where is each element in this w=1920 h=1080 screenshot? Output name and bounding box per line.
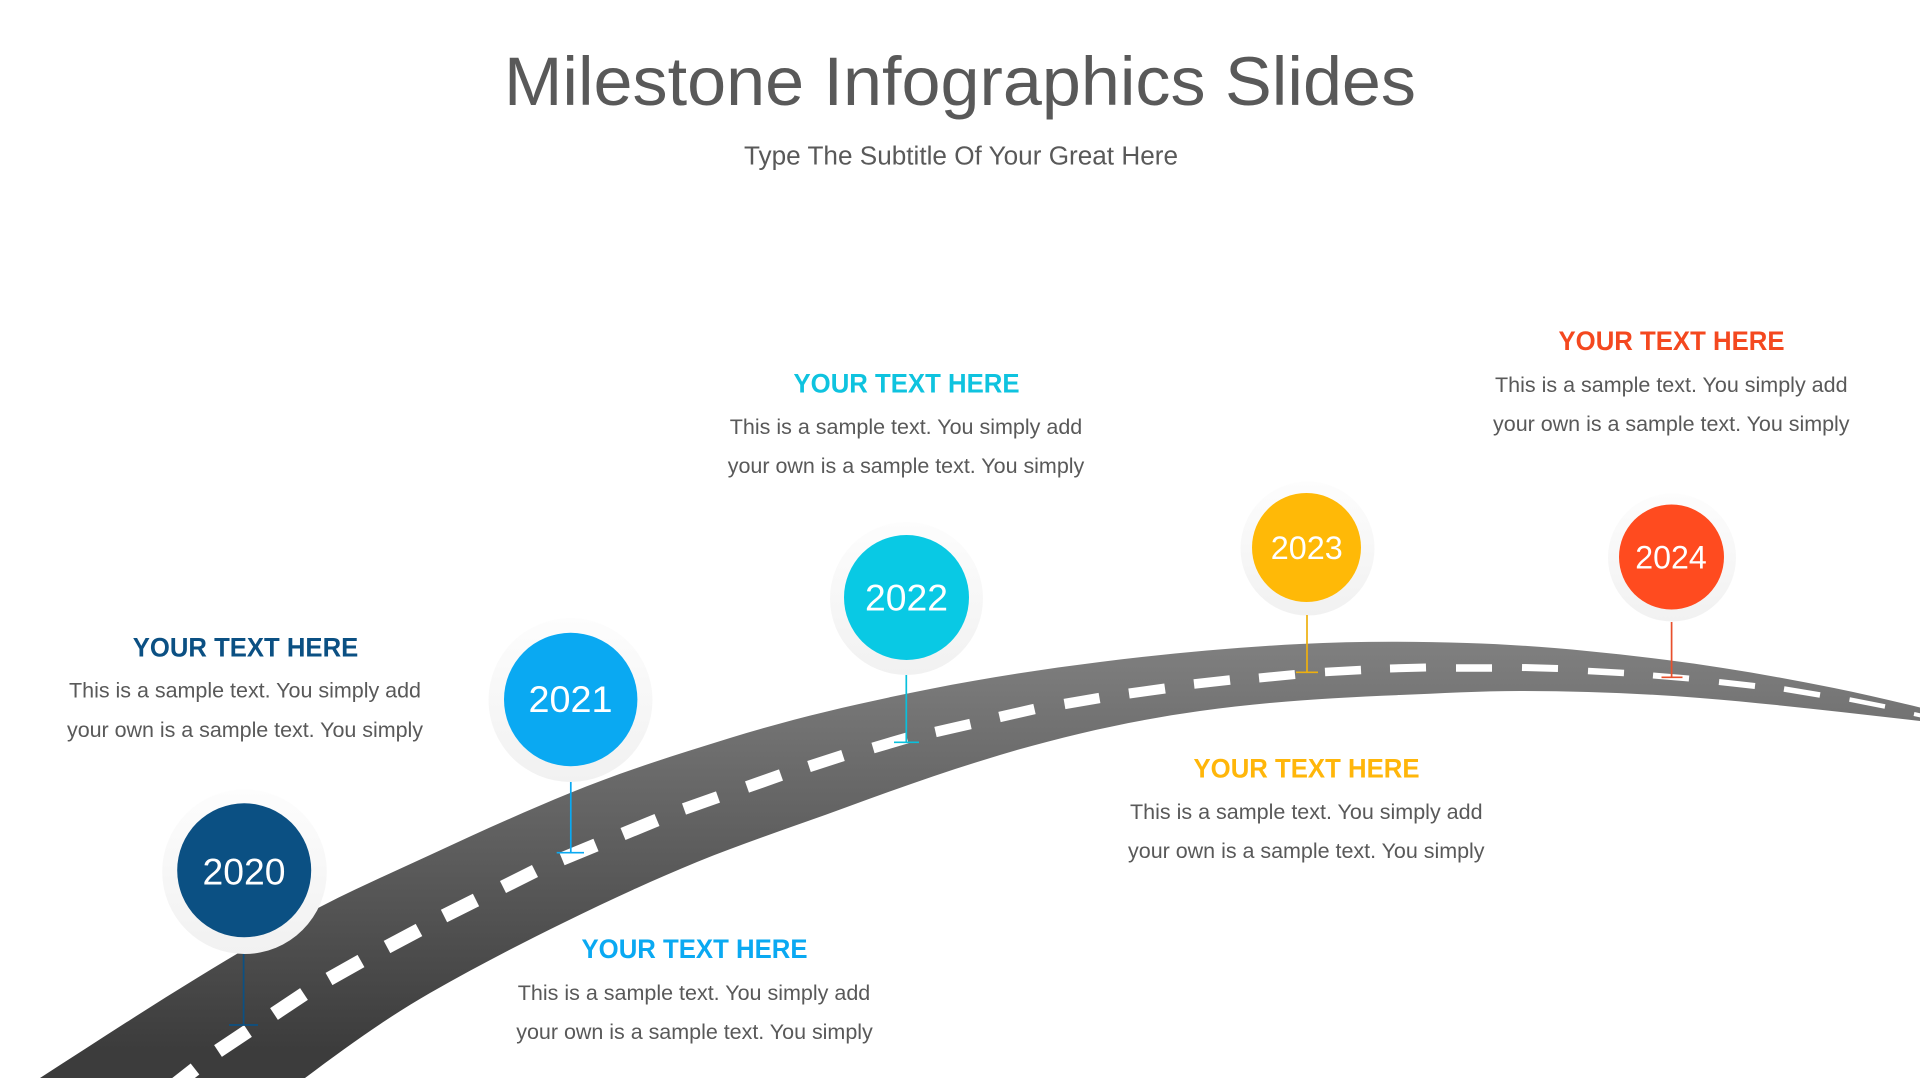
body line 2: your own is a sample text. You simply: [1493, 412, 1850, 436]
body line 2: your own is a sample text. You simply: [67, 718, 423, 742]
text block 2022: [728, 369, 1084, 478]
connector: [1296, 615, 1318, 672]
marker halo: [1240, 482, 1374, 616]
marker halo: [1608, 494, 1736, 622]
marker halo: [488, 618, 652, 782]
body line 2: your own is a sample text. You simply: [728, 454, 1084, 478]
year label: 2023: [1271, 530, 1343, 566]
body line 1: This is a sample text. You simply add: [518, 981, 870, 1005]
milestone 2024: [1608, 494, 1736, 677]
year label: 2021: [528, 679, 612, 720]
year label: 2024: [1635, 540, 1707, 576]
body line 1: This is a sample text. You simply add: [1495, 373, 1848, 397]
milestone 2022: [830, 522, 983, 742]
marker circle: [177, 803, 311, 937]
road surface: [40, 642, 1920, 1078]
heading: YOUR TEXT HERE: [794, 369, 1020, 399]
connector: [229, 954, 258, 1025]
marker circle: [1619, 504, 1724, 610]
text block 2020: [67, 633, 423, 742]
road centre dashes: [167, 668, 1920, 1080]
marker circle: [504, 633, 637, 766]
marker halo: [830, 522, 983, 675]
milestone 2023: [1240, 482, 1374, 672]
milestone 2021: [488, 618, 652, 853]
milestone 2020: [162, 789, 327, 1025]
body line 1: This is a sample text. You simply add: [730, 415, 1082, 439]
title: Milestone Infographics Slides: [504, 43, 1416, 120]
connector: [894, 675, 919, 742]
heading: YOUR TEXT HERE: [582, 934, 808, 964]
heading: YOUR TEXT HERE: [1558, 326, 1784, 356]
text block 2021: [516, 934, 873, 1044]
heading: YOUR TEXT HERE: [1194, 754, 1420, 784]
text block 2024: [1493, 326, 1850, 436]
marker halo: [162, 789, 327, 954]
marker circle: [844, 535, 969, 660]
marker circle: [1252, 493, 1361, 602]
heading: YOUR TEXT HERE: [133, 633, 358, 663]
body line 1: This is a sample text. You simply add: [1130, 800, 1483, 824]
connector: [557, 782, 584, 853]
road: [40, 642, 1920, 1080]
subtitle: Type The Subtitle Of Your Great Here: [744, 142, 1178, 170]
text block 2023: [1128, 754, 1485, 863]
year label: 2020: [202, 852, 286, 892]
year label: 2022: [865, 578, 948, 619]
body line 1: This is a sample text. You simply add: [69, 679, 421, 703]
body line 2: your own is a sample text. You simply: [516, 1020, 873, 1044]
connector: [1662, 622, 1682, 677]
body line 2: your own is a sample text. You simply: [1128, 839, 1485, 863]
